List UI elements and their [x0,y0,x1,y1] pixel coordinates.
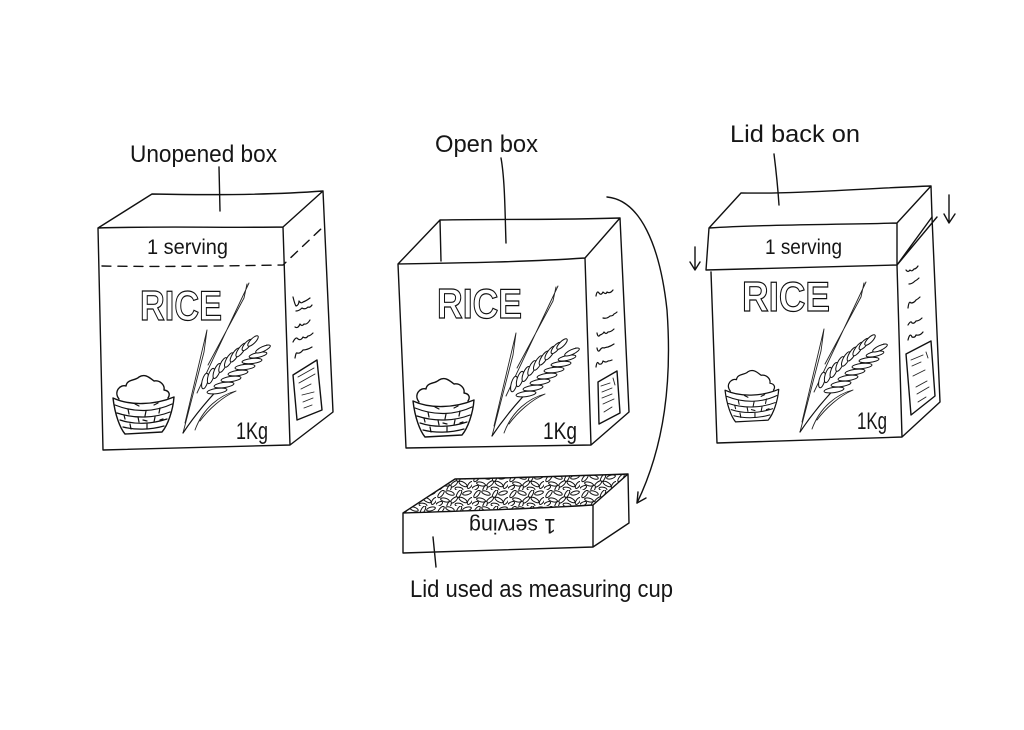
arrow: lid moved to measuring position [607,197,668,503]
upside-down serving text: 1 serving [469,514,556,537]
panel: open box [398,131,629,448]
arrow: right down [944,195,955,223]
icon: rice bowl [113,376,174,434]
brand text: RICE [742,273,830,320]
panel: unopened box [98,141,333,450]
label: lid back on: Lid back on [730,121,860,148]
side panel writing [293,297,313,358]
arrow: left down [690,247,700,270]
label: unopened box: Unopened box [130,141,277,168]
icon: rice plant [800,282,888,432]
panel: lid back on [690,121,955,443]
weight: 1Kg [236,418,268,445]
side nutrition label [598,371,620,424]
icon: rice bowl [413,379,474,437]
leader line [433,537,436,567]
leader line [501,158,506,243]
side nutrition label [906,341,935,415]
icon: rice plant [183,283,271,433]
box outline [98,191,333,450]
label: lid used as measuring cup: Lid used as measuring cup [410,576,673,603]
rice filling [403,474,628,513]
lid [706,186,937,270]
weight: 1Kg [543,418,577,445]
side panel writing [906,266,923,340]
box body [711,217,940,443]
lid serving text: 1 serving [147,236,228,259]
weight: 1Kg [857,408,887,435]
label: open box: Open box [435,131,538,158]
lid serving text: 1 serving [765,236,842,259]
icon: rice plant [492,286,580,436]
leader line [774,154,779,205]
side nutrition label [293,360,322,420]
side panel writing [596,290,617,367]
brand text: RICE [140,282,222,329]
icon: rice bowl [725,370,779,422]
lid outline [403,474,629,553]
leader line [219,167,220,211]
dashed tear line [102,227,323,266]
box outline [398,218,629,448]
brand text: RICE [437,280,522,327]
panel: lid used as cup [403,474,673,603]
